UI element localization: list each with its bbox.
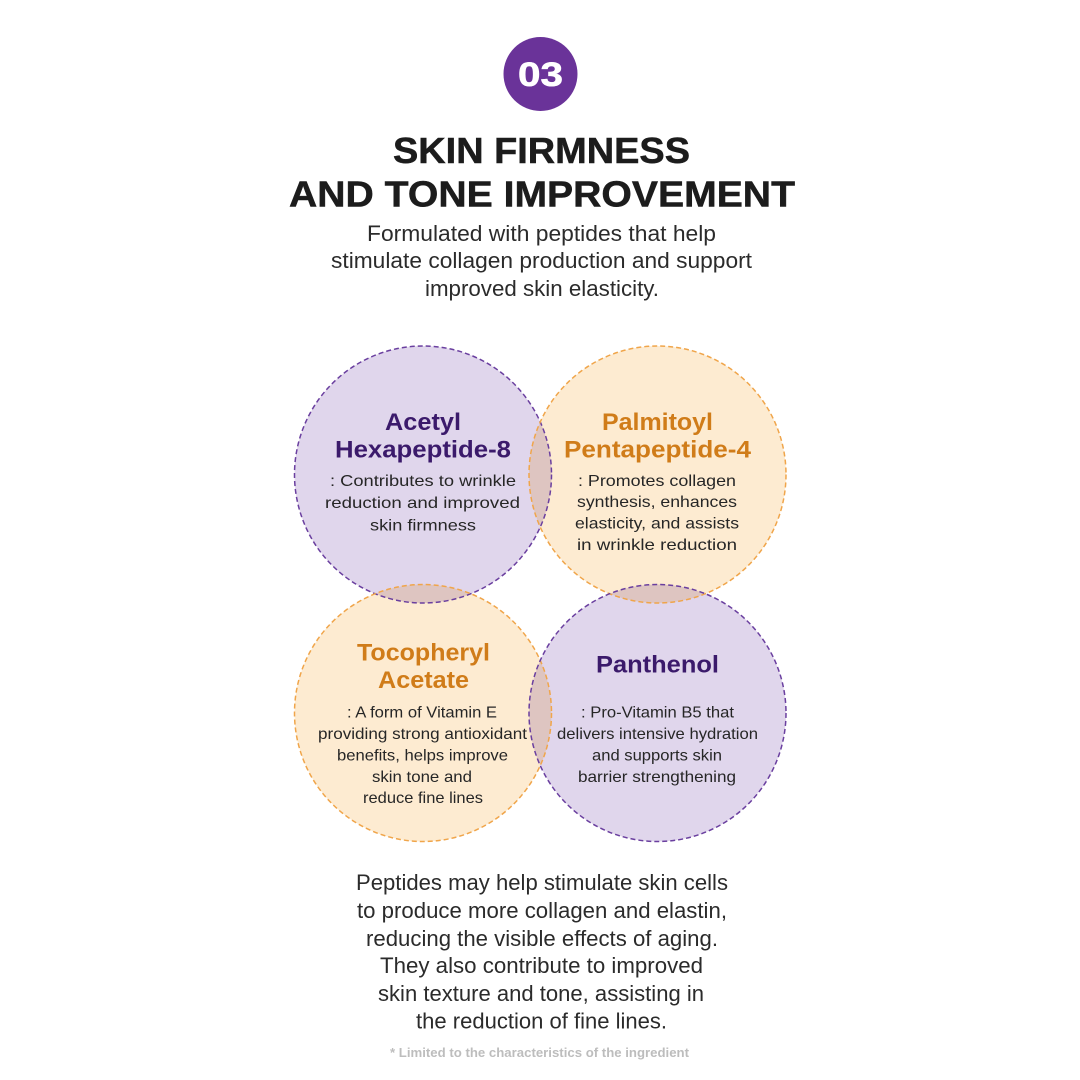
closing text: Peptides may help stimulate skin cells bbox=[356, 870, 728, 895]
panel: Acetyl Hexapeptide-8: Hexapeptide-8 bbox=[335, 436, 511, 464]
panel: Panthenol: barrier strengthening bbox=[578, 769, 736, 786]
panel: Acetyl Hexapeptide-8: skin firmness bbox=[370, 518, 476, 534]
number badge bbox=[504, 37, 578, 111]
panel: Panthenol: Panthenol bbox=[596, 652, 719, 678]
closing text: skin texture and tone, assisting in bbox=[378, 981, 704, 1006]
overlapping circle fills bbox=[294, 346, 786, 842]
intro text: improved skin elasticity. bbox=[425, 276, 659, 301]
title: AND TONE IMPROVEMENT bbox=[289, 174, 795, 214]
panel: Tocopheryl Acetate: reduce fine lines bbox=[363, 790, 483, 807]
closing text: the reduction of fine lines. bbox=[416, 1008, 667, 1034]
panel: Tocopheryl Acetate: providing strong antioxidant bbox=[318, 726, 528, 743]
number badge: 03 bbox=[518, 56, 563, 94]
panel: Palmitoyl Pentapeptide-4: Pentapeptide-4 bbox=[564, 436, 752, 464]
panel: Palmitoyl Pentapeptide-4: elasticity, and assists bbox=[575, 516, 739, 532]
title bbox=[289, 130, 795, 214]
panel: Tocopheryl Acetate: benefits, helps improve bbox=[337, 748, 508, 764]
panel: Panthenol: and supports skin bbox=[592, 748, 722, 764]
panel: Tocopheryl Acetate: : A form of Vitamin E bbox=[347, 704, 497, 722]
panel: Palmitoyl Pentapeptide-4: in wrinkle reduction bbox=[577, 537, 737, 554]
panel: Acetyl Hexapeptide-8: reduction and improved bbox=[325, 495, 520, 512]
title: SKIN FIRMNESS bbox=[393, 130, 690, 171]
closing text: to produce more collagen and elastin, bbox=[357, 898, 727, 923]
panel: Tocopheryl Acetate bbox=[318, 640, 528, 807]
panel: Palmitoyl Pentapeptide-4 bbox=[564, 409, 752, 554]
panel: Acetyl Hexapeptide-8: : Contributes to wrinkle bbox=[330, 473, 516, 490]
intro text: stimulate collagen production and support bbox=[331, 248, 752, 273]
panel: Tocopheryl Acetate: skin tone and bbox=[372, 769, 472, 786]
panel: Tocopheryl Acetate: Tocopheryl bbox=[357, 640, 490, 666]
closing text bbox=[356, 870, 728, 1034]
closing text: They also contribute to improved bbox=[380, 953, 703, 978]
circle outlines bbox=[294, 346, 786, 842]
panel: Palmitoyl Pentapeptide-4: synthesis, enhances bbox=[577, 494, 737, 511]
panel: Palmitoyl Pentapeptide-4: : Promotes collagen bbox=[578, 473, 736, 490]
panel: Panthenol bbox=[557, 652, 758, 786]
panel: Acetyl Hexapeptide-8: Acetyl bbox=[385, 409, 461, 436]
footnote: * Limited to the characteristics of the ingredient bbox=[390, 1046, 690, 1060]
intro text bbox=[331, 221, 752, 301]
closing text: reducing the visible effects of aging. bbox=[366, 926, 718, 951]
intro text: Formulated with peptides that help bbox=[367, 221, 716, 246]
panel: Panthenol: delivers intensive hydration bbox=[557, 726, 758, 743]
panel: Panthenol: : Pro-Vitamin B5 that bbox=[581, 704, 735, 722]
panel: Palmitoyl Pentapeptide-4: Palmitoyl bbox=[602, 409, 713, 436]
panel: Tocopheryl Acetate: Acetate bbox=[378, 667, 469, 694]
panel: Acetyl Hexapeptide-8 bbox=[325, 409, 520, 534]
